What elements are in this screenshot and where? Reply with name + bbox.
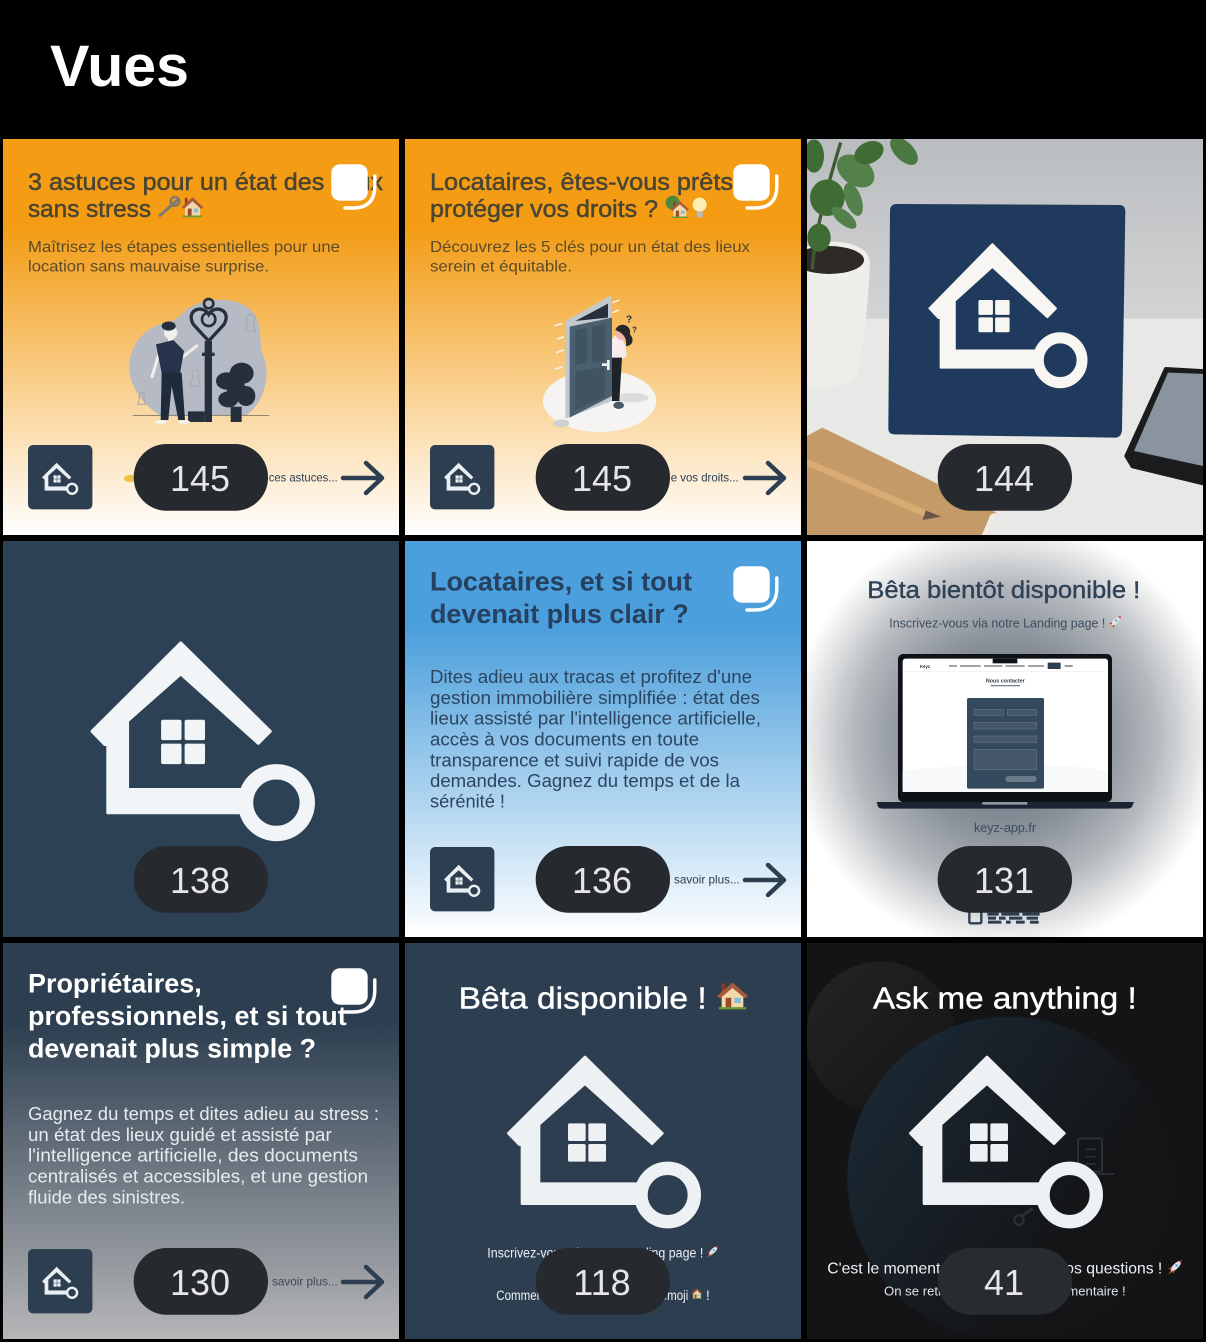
icon: key and house emoji (160, 197, 203, 217)
decorative circles (806, 962, 1171, 1340)
view count pill (938, 846, 1072, 913)
icon: copy (331, 968, 375, 1012)
view count pill: 41 (984, 1262, 1024, 1303)
arrow (745, 463, 784, 493)
view count pill (536, 846, 670, 913)
description (28, 239, 340, 275)
logo (508, 1057, 694, 1222)
view count pill: 136 (572, 860, 632, 901)
description: Découvrez les 5 clés pour un état des lieux (430, 239, 750, 256)
sign-up text: Inscrivez-vous via notre Landing page ! (487, 1245, 703, 1260)
heading: sans stress (28, 196, 151, 223)
call to action text: savoir plus... (674, 873, 740, 887)
body text (28, 1103, 379, 1207)
website address: keyz-app.fr (974, 820, 1037, 835)
prompt text: C'est le moment de poser toutes vos questions ! (827, 1260, 1162, 1277)
icon: rocket (1109, 615, 1122, 628)
view count pill: 118 (573, 1262, 631, 1303)
phone (1126, 369, 1206, 484)
body text: un état des lieux guidé et assisté par (28, 1124, 332, 1145)
view count pill (536, 1248, 670, 1315)
icon: copy (733, 164, 777, 208)
heading: Ask me anything ! (873, 980, 1137, 1015)
panel: propriétaires (3, 943, 399, 1339)
icon: house emoji (717, 982, 748, 1009)
panel: locataires clair (405, 541, 801, 937)
description: serein et équitable. (430, 258, 572, 275)
icon: copy (733, 566, 777, 610)
icon: rocket (707, 1245, 719, 1257)
illustration: woman behind door: ? (626, 315, 632, 326)
heading (431, 172, 732, 222)
body text: Gagnez du temps et dites adieu au stress : (28, 1103, 379, 1124)
heading (28, 172, 384, 218)
comment text: On se retrouve très vite en commentaire ! (884, 1285, 1126, 1299)
heading: devenait plus clair ? (430, 599, 689, 629)
heading (28, 969, 347, 1063)
brand icon (430, 847, 494, 911)
icon: copy (331, 164, 375, 208)
logo (910, 1057, 1096, 1222)
body text (430, 666, 761, 812)
body text: fluide des sinistres. (28, 1186, 185, 1207)
view count pill (134, 846, 268, 913)
heading: Locataires, êtes-vous prêts à (430, 169, 755, 196)
panel: logo photo (794, 132, 1206, 539)
brand icon (430, 445, 494, 509)
arrow (343, 1267, 382, 1297)
illustration: person with giant key (129, 299, 269, 424)
laptop mockup (877, 654, 1134, 809)
heading: Locataires, et si tout (430, 567, 692, 597)
view count pill: 145 (572, 458, 632, 499)
exclamation: ! (706, 1288, 710, 1303)
body text: centralisés et accessibles, et une gestion (28, 1166, 368, 1187)
body text: sérénité ! (430, 791, 505, 812)
view count pill (938, 1248, 1072, 1315)
body text: lieux assisté par l'intelligence artificielle, (430, 708, 761, 729)
view count pill (938, 444, 1072, 511)
navy card (888, 204, 1125, 438)
plant leaves (807, 139, 918, 270)
icon: house, tree and bulb emoji (666, 196, 707, 218)
body text: accès à vos documents en toute (430, 728, 699, 749)
call to action text: ces astuces... (269, 471, 338, 485)
description (430, 239, 750, 275)
icon: pointing hand (124, 475, 134, 482)
brand icon (28, 445, 92, 509)
view count pill: 130 (170, 1262, 230, 1303)
heading: Propriétaires, (28, 969, 202, 999)
arrow (343, 463, 382, 493)
call to action text: savoir plus... (272, 1275, 338, 1289)
heading: devenait plus simple ? (28, 1033, 316, 1063)
heading (430, 567, 692, 629)
panel: locataires droits (405, 139, 801, 535)
description: location sans mauvaise surprise. (28, 258, 269, 275)
illustration: woman behind door: ? (638, 318, 641, 324)
panel: ask me anything (806, 943, 1203, 1340)
heading: 3 astuces pour un état des lieux (28, 169, 383, 196)
description: Maîtrisez les étapes essentielles pour une (28, 239, 340, 256)
brand icon (28, 1249, 92, 1313)
panel: 3 astuces (3, 139, 399, 535)
view count pill: 131 (974, 860, 1034, 901)
arrow (745, 865, 784, 895)
subheading: Inscrivez-vous via notre Landing page ! (889, 615, 1105, 630)
icon: rocket (1168, 1260, 1182, 1274)
body text: l'intelligence artificielle, des documents (28, 1145, 358, 1166)
panel: bêta bientôt disponible (807, 541, 1203, 937)
illustration: woman behind door (543, 295, 656, 432)
body text: Dites adieu aux tracas et profitez d'une (430, 666, 752, 687)
laptop mockup: Nous contacter (986, 678, 1025, 684)
notebook and pencil (804, 428, 997, 539)
heading: Bêta disponible ! (459, 980, 707, 1015)
body text: transparence et suivi rapide de vos (430, 749, 719, 770)
logo (92, 643, 307, 834)
body text: gestion immobilière simplifiée : état des (430, 687, 760, 708)
view count pill: 145 (170, 458, 230, 499)
view count pill: 138 (170, 860, 230, 901)
body text: demandes. Gagnez du temps et de la (430, 770, 741, 791)
comment text: Commentez avec votre plus bel emoji (496, 1288, 688, 1303)
illustration: woman behind door: ? (632, 326, 637, 335)
heading: protéger vos droits ? (430, 196, 658, 223)
plant pot (807, 260, 870, 319)
heading: Bêta bientôt disponible ! (867, 577, 1140, 604)
view count pill (134, 1248, 268, 1315)
view count pill: 144 (974, 458, 1034, 499)
call to action text: e vos droits... (671, 471, 739, 485)
heading: professionnels, et si tout (28, 1001, 347, 1031)
icon: small house emoji (692, 1289, 702, 1299)
photo scene (794, 132, 1206, 539)
title: Vues (50, 34, 189, 99)
panel: bêta disponible (405, 943, 801, 1339)
QR code (969, 908, 1040, 924)
view count pill (134, 444, 268, 511)
view count pill (536, 444, 670, 511)
panel: logo on navy (3, 541, 399, 937)
laptop mockup: Keyz (920, 664, 930, 669)
